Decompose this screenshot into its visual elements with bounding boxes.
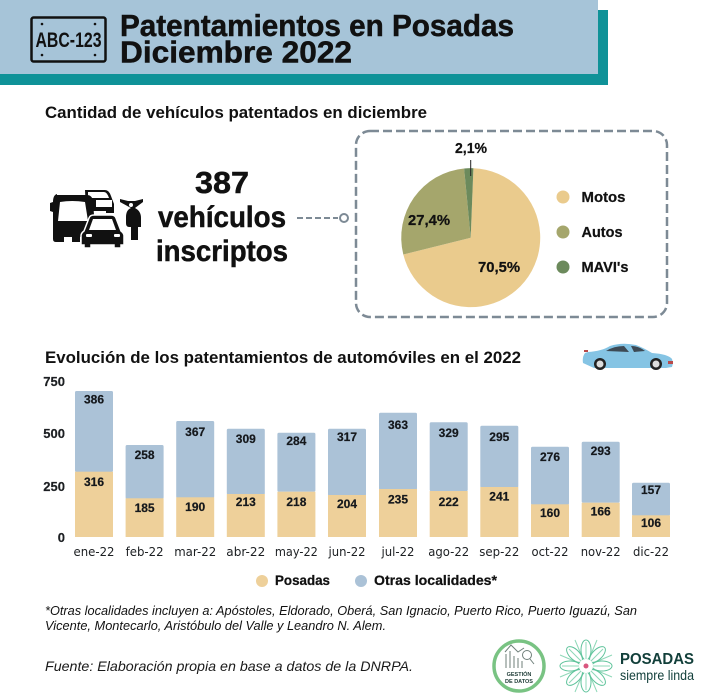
header banner bbox=[0, 0, 608, 85]
logo: gestión de datos bbox=[494, 641, 544, 691]
chart legend: Posadas bbox=[275, 573, 330, 588]
y axis labels bbox=[43, 374, 65, 545]
values: Posadas: 222 bbox=[439, 495, 459, 509]
heading: evolución: Evolución de los patentamientos de automóviles en el 2022 bbox=[45, 348, 521, 367]
pie labels: 27,4% bbox=[408, 212, 450, 229]
title: Diciembre 2022 bbox=[120, 36, 352, 70]
x axis labels: jun-22 bbox=[328, 544, 366, 559]
x axis labels bbox=[74, 544, 669, 559]
icon: license plate: ABC-123 bbox=[36, 29, 102, 52]
values: Otras localidades: 309 bbox=[236, 432, 256, 446]
pie labels: 2,1% bbox=[455, 140, 487, 157]
logo: gestión de datos: DE DATOS bbox=[505, 679, 533, 685]
logo: Posadas siempre linda: POSADAS bbox=[620, 651, 694, 668]
values: Otras localidades: 363 bbox=[388, 418, 408, 432]
big number: 387 vehículos inscriptos: vehículos bbox=[158, 201, 286, 234]
y axis labels: 750 bbox=[43, 374, 65, 389]
big number: 387 vehículos inscriptos bbox=[156, 165, 288, 268]
footnote bbox=[45, 604, 637, 633]
values: Posadas: 185 bbox=[135, 501, 155, 515]
values: Posadas: 106 bbox=[641, 516, 661, 530]
x axis labels: dic-22 bbox=[633, 544, 669, 559]
values: Posadas: 213 bbox=[236, 495, 256, 509]
chart legend bbox=[256, 573, 498, 588]
logo: gestión de datos: GESTIÓN bbox=[507, 670, 531, 678]
x axis labels: may-22 bbox=[275, 544, 318, 559]
legend: Autos bbox=[582, 224, 622, 241]
values: Otras localidades: 386 bbox=[84, 392, 104, 406]
values: Posadas: 218 bbox=[286, 495, 307, 509]
chart legend: Otras localidades* bbox=[374, 573, 498, 588]
y axis labels: 0 bbox=[58, 530, 65, 545]
x axis labels: abr-22 bbox=[226, 544, 265, 559]
bars: Posadas bbox=[75, 472, 670, 537]
pie labels: 70,5% bbox=[478, 259, 520, 276]
x axis labels: ago-22 bbox=[428, 544, 469, 559]
legend: Motos bbox=[582, 189, 626, 206]
icon: license plate bbox=[32, 18, 106, 62]
connector bbox=[297, 214, 348, 222]
values: Otras localidades: 367 bbox=[185, 425, 206, 439]
x axis labels: mar-22 bbox=[174, 544, 216, 559]
pie labels bbox=[408, 140, 520, 276]
heading: cantidad de vehículos: Cantidad de vehículos patentados en diciembre bbox=[45, 103, 427, 122]
logo: flower bbox=[560, 640, 612, 692]
big number: 387 vehículos inscriptos: 387 bbox=[195, 165, 249, 200]
x axis labels: ene-22 bbox=[74, 544, 114, 559]
legend bbox=[556, 189, 628, 276]
big number: 387 vehículos inscriptos: inscriptos bbox=[156, 235, 288, 268]
values: Posadas: 235 bbox=[388, 492, 408, 506]
x axis labels: nov-22 bbox=[581, 544, 621, 559]
chart: stacked bars bbox=[43, 374, 670, 559]
footnote: Vicente, Montecarlo, Aristóbulo del Valle y Leandro N. Alem. bbox=[45, 619, 386, 633]
pie bbox=[401, 160, 540, 307]
values: Posadas: 241 bbox=[489, 490, 510, 504]
values: Otras localidades: 157 bbox=[641, 483, 661, 497]
values: Otras localidades: 295 bbox=[489, 430, 510, 444]
values: Posadas: 204 bbox=[337, 497, 357, 511]
values: Posadas bbox=[84, 475, 661, 530]
icon: vehicles bbox=[50, 190, 143, 248]
values: Posadas: 316 bbox=[84, 475, 104, 489]
values: Posadas: 166 bbox=[591, 504, 611, 518]
values: Posadas: 160 bbox=[540, 506, 560, 520]
values: Otras localidades: 329 bbox=[439, 426, 459, 440]
footnote: *Otras localidades incluyen a: Apóstoles, Eldorado, Oberá, San Ignacio, Puerto Rico, Puerto Iguazú, San bbox=[45, 604, 637, 618]
x axis labels: jul-22 bbox=[381, 544, 414, 559]
title: Patentamientos en Posadas bbox=[120, 9, 514, 43]
values: Otras localidades: 284 bbox=[286, 434, 307, 448]
x axis labels: sep-22 bbox=[479, 544, 519, 559]
y axis labels: 250 bbox=[43, 479, 65, 494]
x axis labels: oct-22 bbox=[532, 544, 568, 559]
x axis labels: feb-22 bbox=[126, 544, 164, 559]
title bbox=[120, 9, 514, 70]
icon: car bbox=[583, 344, 673, 370]
values: Otras localidades: 258 bbox=[135, 448, 155, 462]
values: Posadas: 190 bbox=[185, 500, 206, 514]
logo: Posadas siempre linda: siempre linda bbox=[620, 667, 694, 683]
legend: MAVI's bbox=[582, 259, 628, 276]
values: Otras localidades bbox=[84, 392, 661, 497]
values: Otras localidades: 317 bbox=[337, 430, 357, 444]
bars: Otras localidades bbox=[75, 391, 670, 516]
panel: pie chart bbox=[356, 131, 667, 317]
values: Otras localidades: 293 bbox=[591, 444, 611, 458]
logo: Posadas siempre linda bbox=[620, 651, 694, 683]
values: Otras localidades: 276 bbox=[540, 450, 560, 464]
y axis labels: 500 bbox=[43, 426, 65, 441]
source: Fuente: Elaboración propia en base a datos de la DNRPA. bbox=[45, 658, 413, 674]
